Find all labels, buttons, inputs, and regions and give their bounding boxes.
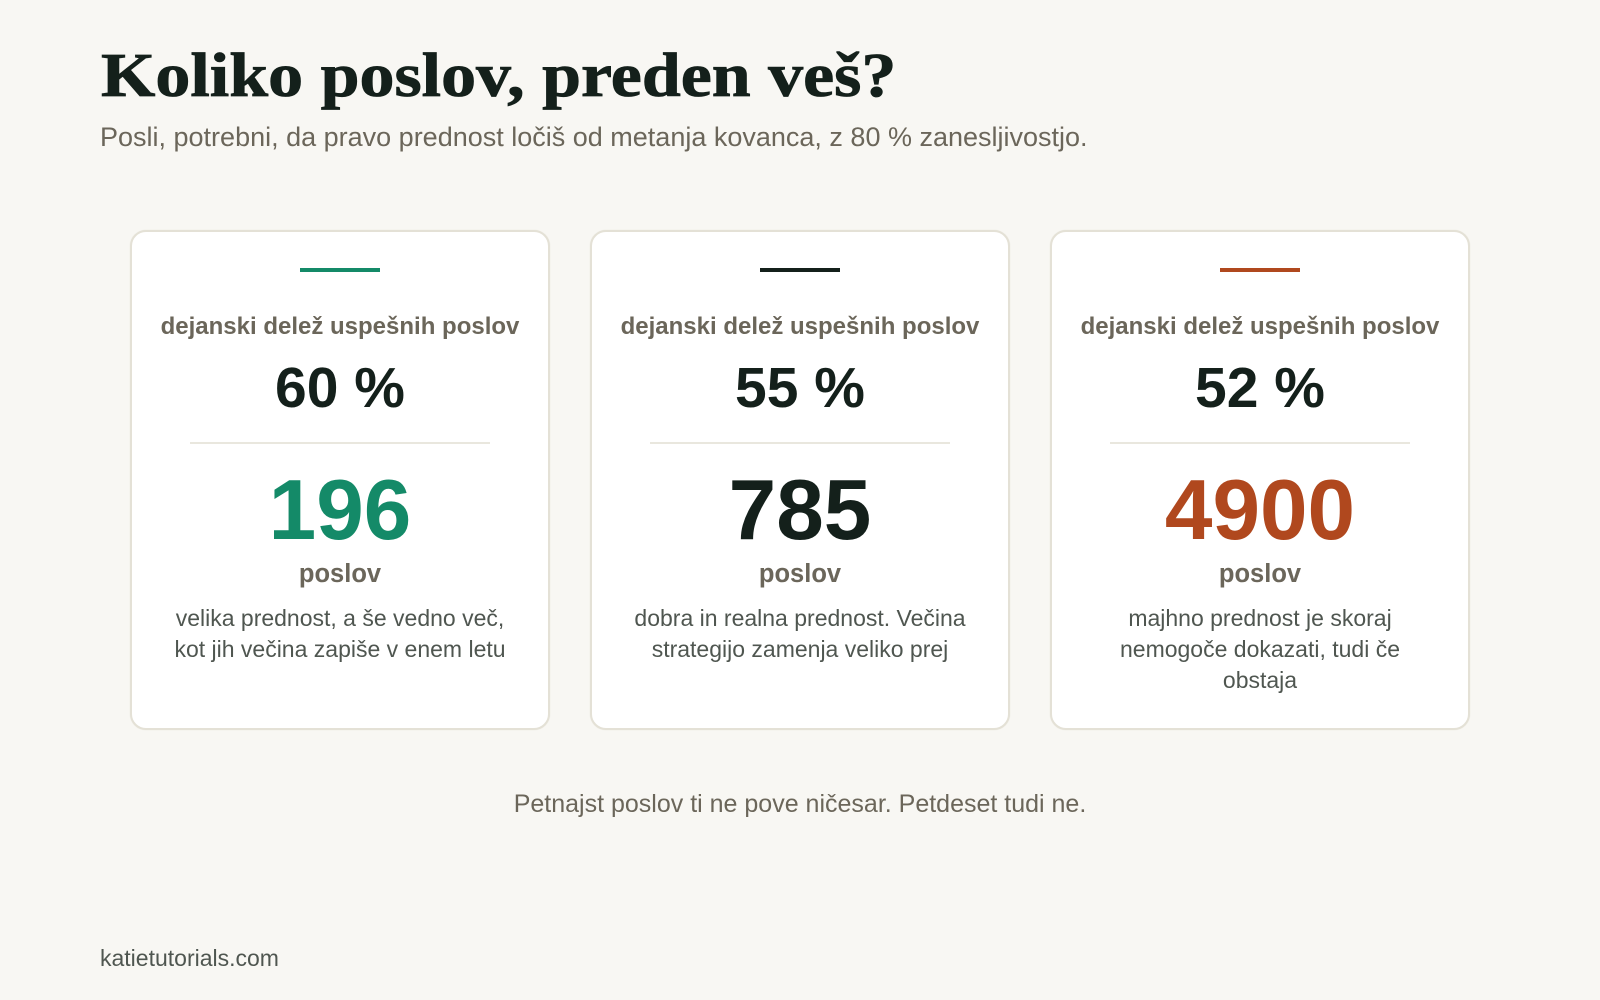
title: Koliko poslov, preden veš? xyxy=(101,42,896,110)
unit label: poslov xyxy=(759,560,841,588)
panel: 55 % card xyxy=(590,230,1010,730)
description: kot jih večina zapiše v enem letu xyxy=(174,636,506,662)
panel: 52 % card xyxy=(1050,230,1470,730)
label: actual win rate: dejanski delež uspešnih poslov xyxy=(1081,313,1439,340)
unit label: poslov xyxy=(1219,560,1301,588)
description xyxy=(1120,605,1400,693)
accent bar: rust xyxy=(1220,268,1300,272)
description: strategijo zamenja veliko prej xyxy=(652,636,948,662)
closing note: Petnajst poslov ti ne pove ničesar. Petdeset tudi ne. xyxy=(514,790,1086,818)
description xyxy=(634,605,966,662)
accent bar: green xyxy=(300,268,380,272)
win rate value: 55 % xyxy=(735,356,865,420)
trade count: 4900 xyxy=(1165,463,1355,558)
label: actual win rate: dejanski delež uspešnih poslov xyxy=(621,313,979,340)
description: obstaja xyxy=(1223,667,1297,693)
accent bar: dark xyxy=(760,268,840,272)
panel: 60 % card xyxy=(130,230,550,730)
source: website: katietutorials.com xyxy=(100,945,279,971)
description: velika prednost, a še vedno več, xyxy=(176,605,504,631)
trade count: 785 xyxy=(729,463,871,558)
unit label: poslov xyxy=(299,560,381,588)
trade count: 196 xyxy=(269,463,411,558)
description: nemogoče dokazati, tudi če xyxy=(1120,636,1400,662)
description: majhno prednost je skoraj xyxy=(1128,605,1392,631)
win rate value: 52 % xyxy=(1195,356,1325,420)
description: dobra in realna prednost. Večina xyxy=(634,605,966,631)
description xyxy=(174,605,506,662)
subtitle: Posli, potrebni, da pravo prednost ločiš od metanja kovanca, z 80 % zanesljivostjo. xyxy=(100,122,1088,152)
label: actual win rate: dejanski delež uspešnih poslov xyxy=(161,313,519,340)
win rate value: 60 % xyxy=(275,356,405,420)
